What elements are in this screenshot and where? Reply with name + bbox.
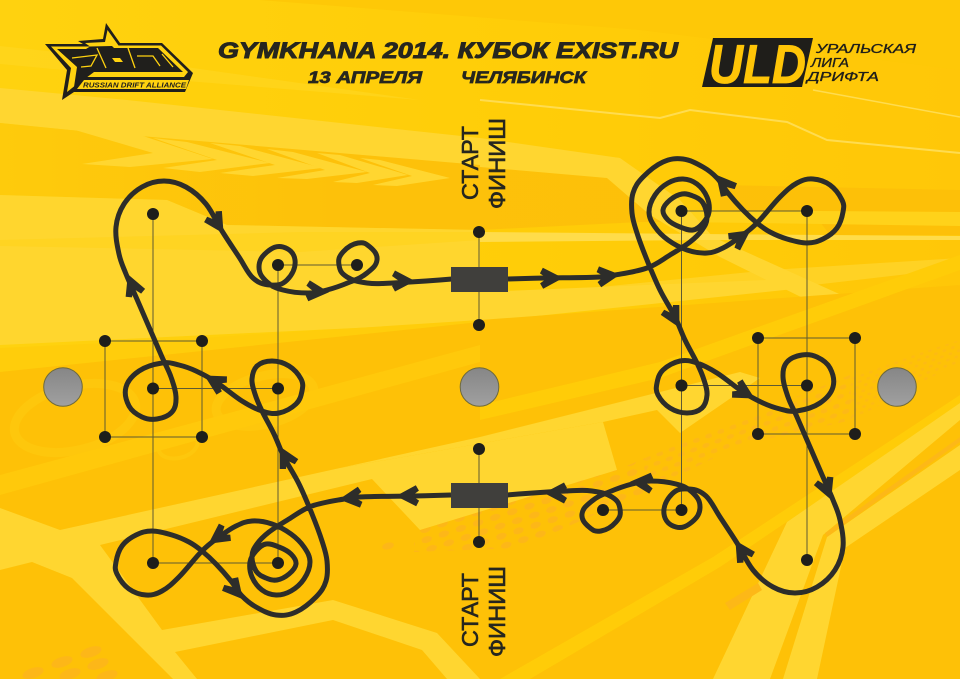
dark wedge: [0, 123, 960, 235]
logo: Ural Drift League: УРАЛЬСКАЯ: [815, 42, 917, 56]
logo: Russian Drift Alliance: RUSSIAN DRIFT ALLIANCE: [83, 80, 187, 90]
chevrons: [75, 130, 450, 186]
pale roads lower left and centre: [0, 422, 617, 679]
logo: Ural Drift League: ДРИФТА: [804, 70, 879, 84]
title: GYMKHANA 2014. КУБОК EXIST.RU: [218, 38, 679, 63]
logo mark block: [57, 46, 183, 87]
logo strapline: [77, 80, 189, 89]
track route: right half: [507, 159, 844, 593]
logo: Ural Drift League: [702, 33, 917, 95]
label: finish top: ФИНИШ: [484, 118, 510, 209]
logo: Russian Drift Alliance: [45, 23, 193, 100]
date: 13 АПРЕЛЯ: [308, 68, 423, 87]
start box bottom: [451, 483, 508, 508]
logo: Ural Drift League: ULD: [709, 33, 806, 95]
city: ЧЕЛЯБИНСК: [461, 68, 588, 87]
label: finish bottom: ФИНИШ: [484, 566, 510, 657]
watermark rings: [7, 365, 319, 464]
start box top: [451, 267, 508, 292]
logo: Ural Drift League: ЛИГА: [810, 56, 849, 70]
course grid lines: [105, 211, 855, 563]
pale left block: [0, 195, 480, 345]
pale roads lower right: [713, 403, 960, 679]
track route: left half: [115, 181, 452, 615]
label: start bottom: СТАРТ: [457, 573, 483, 647]
lower base: [0, 285, 960, 679]
label: start top: СТАРТ: [457, 126, 483, 200]
grey circle centre: [460, 368, 499, 406]
grey circle left: [44, 368, 82, 406]
pale diagonal strip upper right: [480, 145, 857, 303]
cone markers: [99, 205, 861, 569]
grey circle right: [878, 368, 916, 406]
dot bands: [414, 458, 650, 552]
